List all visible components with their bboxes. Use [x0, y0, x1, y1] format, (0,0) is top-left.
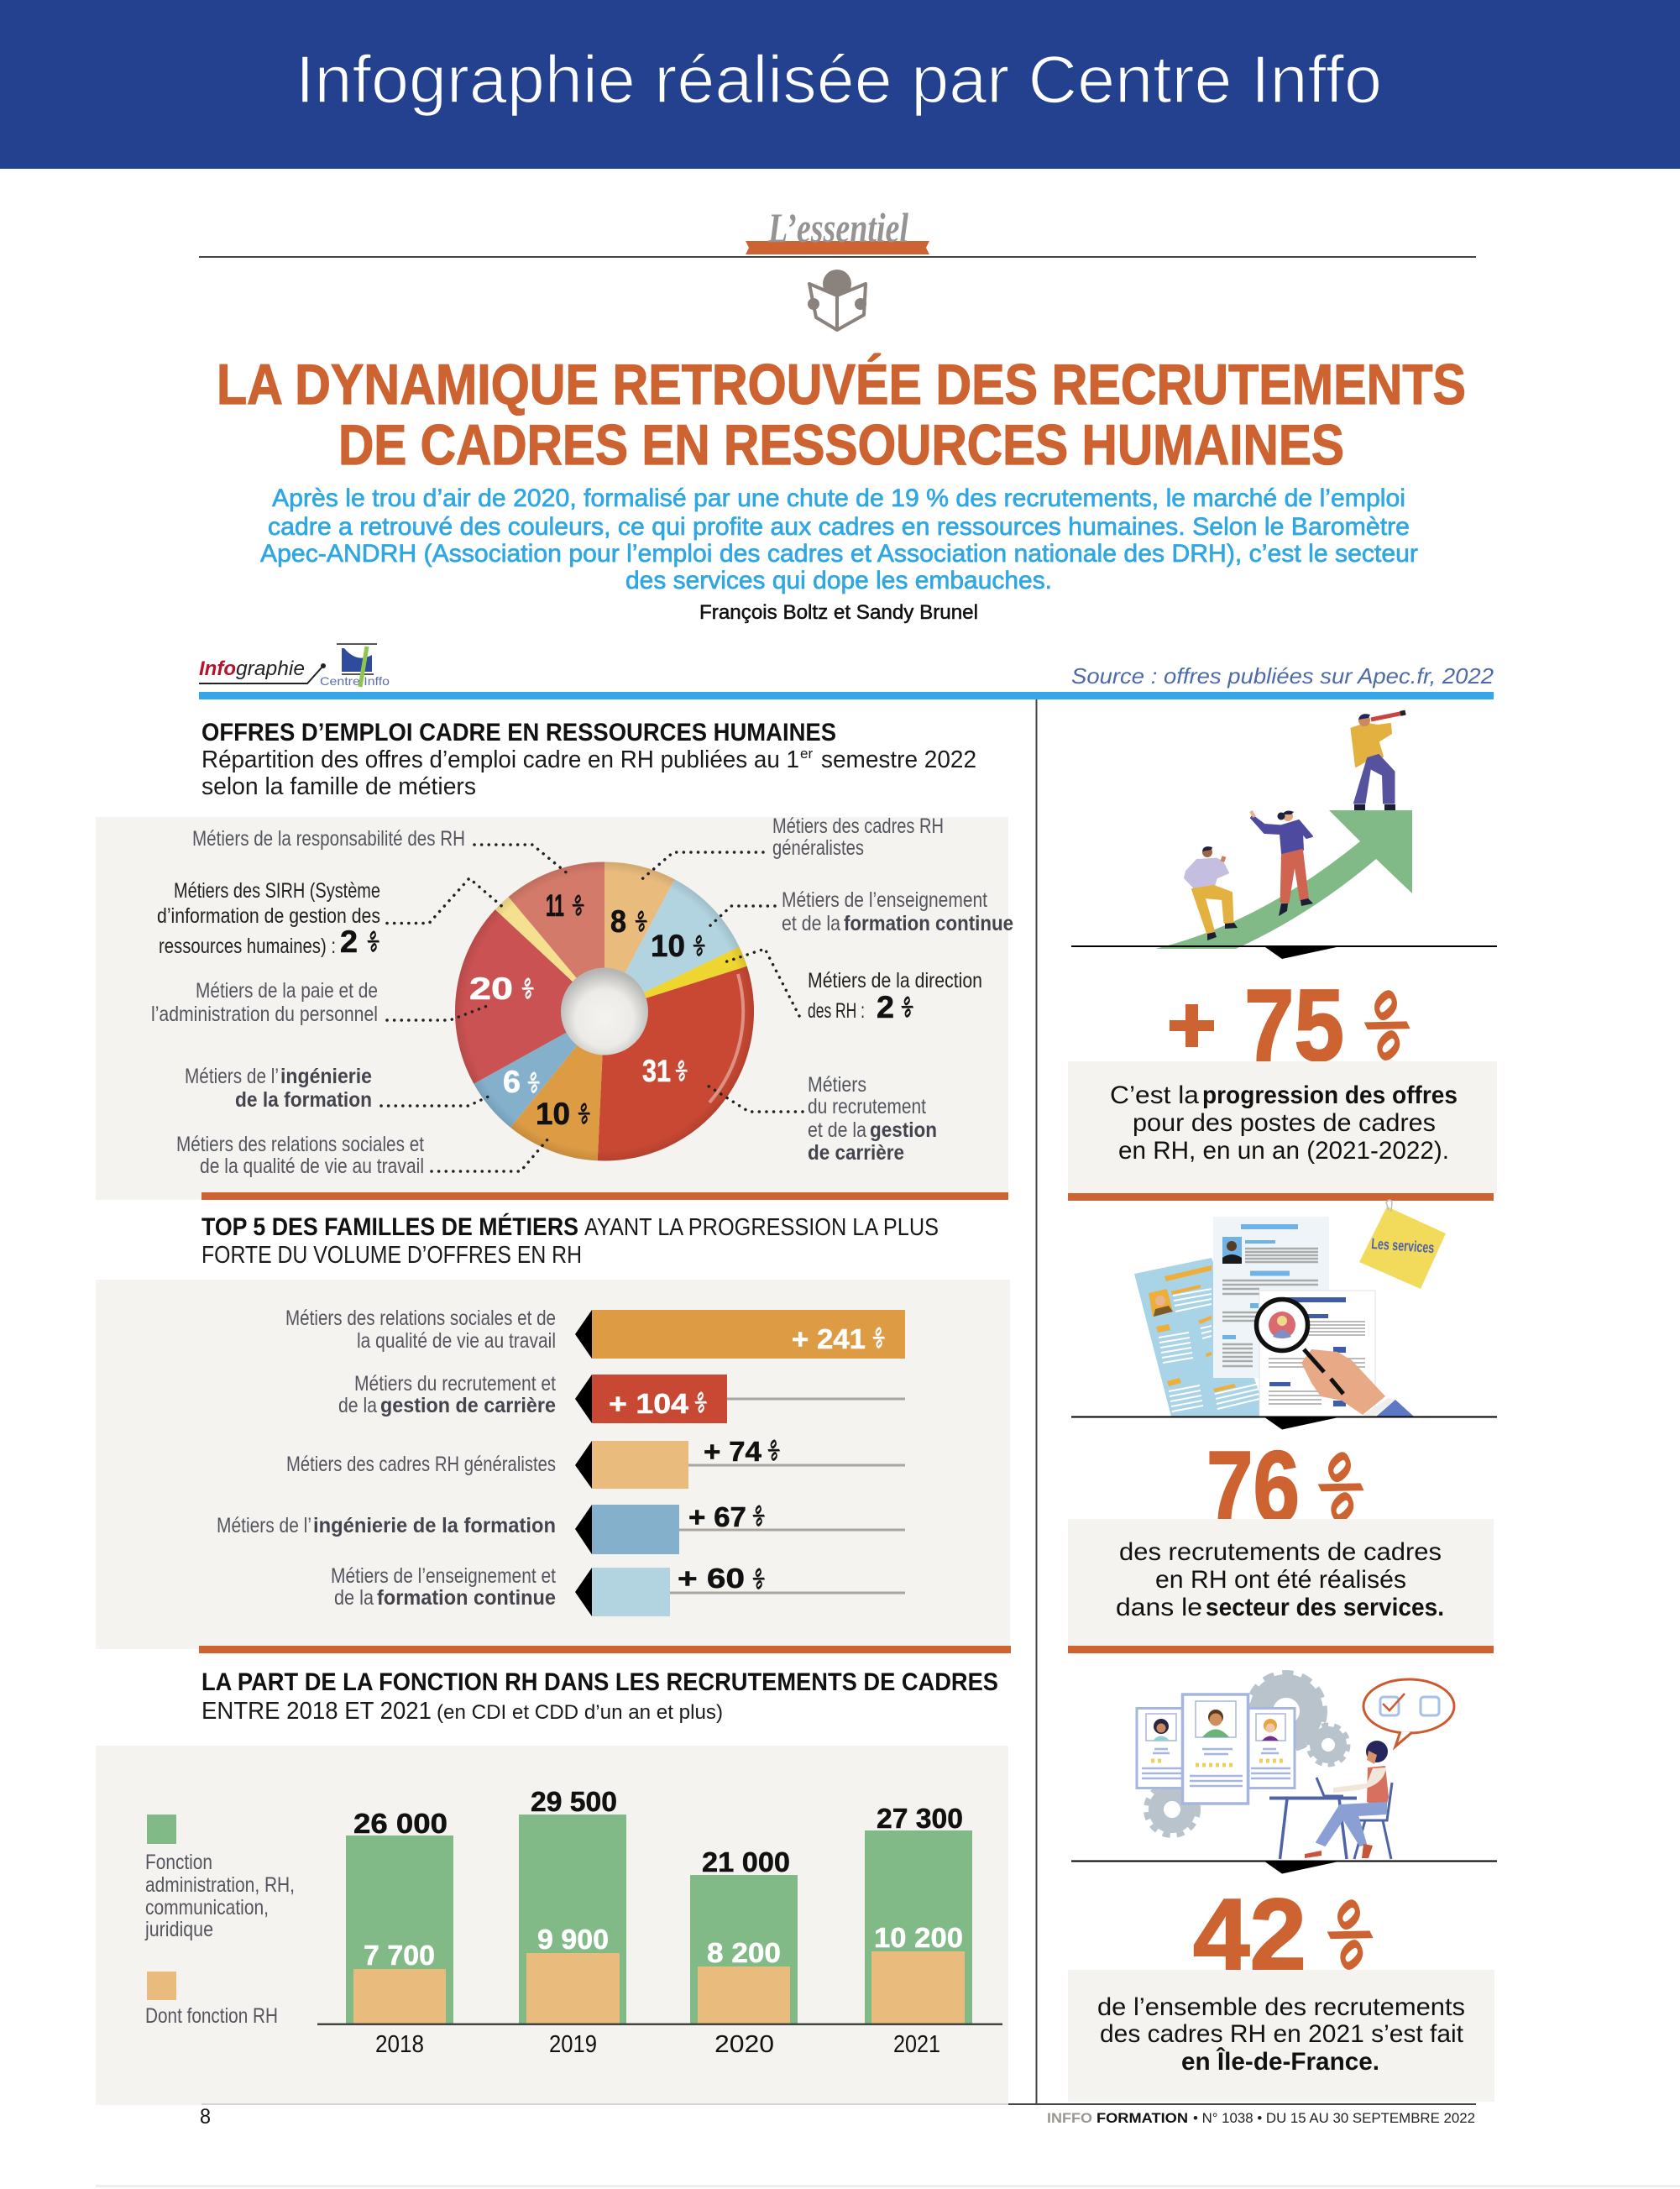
bar: ingénierie: % [749, 1500, 769, 1531]
blue separator [199, 692, 1494, 699]
bar: ingénierie: + 67 [688, 1501, 746, 1532]
stat: 42 %: 42 [1193, 1877, 1306, 1992]
slice labels: 2 [877, 990, 894, 1024]
section heading: top 5 [201, 1212, 939, 1269]
bar: recrutement: de la [338, 1394, 377, 1417]
slice labels: Métiers de la direction [808, 969, 982, 992]
panel: stat text 1: en RH, en un an (2021-2022). [1118, 1137, 1449, 1165]
bar: enseignement [331, 1563, 905, 1616]
slice values: % [518, 973, 538, 1003]
divider with wedge 3 [1071, 1861, 1497, 1874]
slice values: 11 [546, 888, 564, 923]
slice labels: et de la [782, 912, 840, 935]
stat: 42 %: % [1314, 1886, 1386, 1984]
bar: ingénierie: Métiers de l’ [217, 1514, 311, 1537]
illustration: recruiter at desk with profiles [1137, 1673, 1454, 1859]
section heading: offres d'emploi: Répartition des offres d’emploi cadre en RH publiées au 1 [201, 746, 799, 773]
slice values: % [631, 906, 652, 936]
legend: administration, RH, [145, 1873, 295, 1897]
x axis [317, 2024, 1002, 2025]
section heading: offres d'emploi: selon la famille de métiers [201, 773, 476, 800]
logo: infographie Centre Inffo: Info [199, 657, 236, 680]
slice values [469, 888, 709, 1131]
slice labels: du recrutement [808, 1095, 926, 1118]
logo: infographie Centre Inffo [199, 643, 390, 688]
slice values: 20 [469, 971, 513, 1006]
slice values: % [568, 890, 589, 920]
slice values: % [574, 1098, 594, 1129]
bars 2021: 2021 [893, 2031, 940, 2058]
bars 2018: 2018 [375, 2031, 424, 2058]
footer credit [1037, 2103, 1476, 2126]
slice values: % [689, 930, 709, 961]
panel: stat text 1: C’est la [1110, 1081, 1199, 1109]
slice labels: gestion [870, 1118, 937, 1142]
stat: 76 % [1206, 1430, 1377, 1544]
title [217, 353, 1466, 477]
stat: +75 % [1170, 968, 1423, 1082]
bars 2019 [519, 1786, 626, 2058]
footer credit: FORMATION [1096, 2110, 1188, 2126]
section heading: part de la fonction RH: LA PART DE LA FONCTION RH DANS LES RECRUTEMENTS DE CADRES [201, 1668, 998, 1696]
rubric: l'essentiel: L’essentiel [767, 204, 908, 251]
legend: juridique [144, 1918, 213, 1941]
bar: relations sociales [285, 1307, 905, 1359]
lead paragraph: Après le trou d’air de 2020, formalisé par une chute de 19 % des recrutements, le marché de l’emploi [272, 484, 1405, 512]
bar: recrutement: Métiers du recrutement et [354, 1372, 556, 1396]
panel: stat text 1: pour des postes de cadres [1133, 1109, 1436, 1137]
panel: stacked bar chart [96, 1746, 1008, 2105]
bars 2018: 26 000 [353, 1808, 447, 1839]
lead paragraph: cadre a retrouvé des couleurs, ce qui profite aux cadres en ressources humaines. Selon le Baromètre [268, 513, 1410, 541]
bars 2018: 7 700 [364, 1940, 435, 1971]
footer credit: INFFO [1047, 2110, 1092, 2126]
slice labels: de carrière [808, 1141, 904, 1165]
slice labels: généralistes [772, 836, 864, 860]
bar: ingénierie: ingénierie de la formation [313, 1514, 556, 1537]
source note: Source : offres publiées sur Apec.fr, 2022 [1071, 663, 1494, 689]
stat: 42 % [1193, 1877, 1386, 1992]
bar: cadres généralistes: % [764, 1435, 784, 1465]
panel: stat text 2: des recrutements de cadres [1119, 1538, 1442, 1566]
bars 2021 [865, 1803, 972, 2058]
title: DE CADRES EN RESSOURCES HUMAINES [338, 413, 1344, 477]
bar: cadres généralistes: Métiers des cadres RH généralistes [286, 1453, 556, 1476]
title: LA DYNAMIQUE RETROUVÉE DES RECRUTEMENTS [217, 353, 1466, 416]
bars 2020: 21 000 [702, 1846, 790, 1877]
slice labels: Métiers de l’enseignement [782, 888, 987, 912]
stat: 76 %: % [1305, 1438, 1377, 1537]
bars 2020 [690, 1846, 798, 2058]
slice labels: Métiers de l’ [185, 1065, 279, 1088]
bar: cadres généralistes: + 74 [704, 1436, 762, 1467]
slice values: % [672, 1055, 692, 1086]
bar: enseignement: de la [334, 1586, 374, 1610]
page number: 8 [200, 2105, 211, 2129]
slice labels: ingénierie [280, 1065, 372, 1088]
header banner [0, 0, 1680, 169]
bars 2019: 9 900 [537, 1924, 609, 1955]
illustration: CV under magnifying glass [1134, 1200, 1446, 1417]
slice labels: de la formation [235, 1088, 372, 1112]
bars 2021: 10 200 [874, 1922, 963, 1953]
lead paragraph [260, 484, 1418, 594]
lead paragraph: Apec-ANDRH (Association pour l’emploi des cadres et Association nationale des DRH), c’est le secteur [260, 540, 1418, 568]
bar: enseignement: Métiers de l’enseignement et [331, 1564, 556, 1588]
slice labels: % [364, 926, 384, 956]
bars 2020: 8 200 [707, 1937, 781, 1968]
bar: recrutement: gestion de carrière [380, 1394, 556, 1417]
divider with wedge 2 [1071, 1416, 1497, 1429]
slice labels: % [898, 992, 918, 1022]
slice labels: ressources humaines) : [159, 935, 336, 958]
stat: +75 %: % [1351, 977, 1423, 1075]
bar: recrutement [338, 1372, 905, 1423]
bar: relations sociales: % [869, 1322, 889, 1353]
slice values: 31 [642, 1054, 671, 1088]
panel: stat text 3 [1068, 1970, 1494, 2102]
section heading: offres d'emploi: OFFRES D’EMPLOI CADRE EN RESSOURCES HUMAINES [201, 719, 836, 746]
slice labels [151, 814, 1013, 1178]
logo: infographie Centre Inffo: Centre Inffo [320, 674, 390, 688]
panel: stat text 3: des cadres RH en 2021 s’est fait [1100, 2020, 1464, 2048]
section heading: part de la fonction RH [201, 1668, 998, 1725]
slice labels: Métiers [808, 1073, 866, 1097]
slice labels: Métiers de la responsabilité des RH [192, 827, 465, 851]
bars 2021: 27 300 [877, 1803, 963, 1834]
panel: stat text 2: dans le [1116, 1594, 1202, 1621]
panel: stat text 1 [1068, 1061, 1497, 1201]
slice labels: d’information de gestion des [157, 904, 380, 928]
panel: stat text 1: progression des offres [1202, 1081, 1458, 1109]
lead paragraph: des services qui dope les embauches. [625, 567, 1052, 594]
panel: top 5 bar chart [96, 1280, 1011, 1653]
bar: recrutement: % [691, 1387, 711, 1417]
panel: stat text 2: en RH ont été réalisés [1155, 1566, 1406, 1594]
slice labels: formation continue [844, 912, 1013, 935]
bar: enseignement: formation continue [377, 1586, 556, 1610]
slice values: 8 [610, 904, 626, 939]
legend: Fonction [145, 1851, 212, 1874]
section heading: offres d'emploi: er [800, 746, 813, 762]
stat: 76 %: 76 [1206, 1430, 1300, 1544]
panel: stat text 3: en Île-de-France. [1181, 2047, 1379, 2076]
panel: stat text 3: de l’ensemble des recrutements [1097, 1993, 1465, 2021]
section heading: part de la fonction RH: (en CDI et CDD d’un an et plus) [437, 1701, 723, 1724]
slice labels: Métiers des relations sociales et [176, 1133, 424, 1156]
logo: infographie Centre Inffo: graphie [236, 657, 305, 680]
footer credit: • N° 1038 • DU 15 AU 30 SEPTEMBRE 2022 [1193, 2110, 1475, 2126]
leader lines [381, 845, 803, 1171]
bar: relations sociales: + 241 [792, 1323, 866, 1354]
slice labels: l’administration du personnel [151, 1003, 378, 1026]
panel: donut chart [96, 814, 1013, 1200]
slice values: 10 [536, 1097, 570, 1131]
bar: relations sociales: la qualité de vie au travail [357, 1329, 556, 1353]
slice values: 6 [503, 1065, 521, 1099]
illustration: people climbing growth arrow [1155, 713, 1412, 949]
slice labels: de la qualité de vie au travail [200, 1155, 424, 1178]
byline: François Boltz et Sandy Brunel [699, 601, 978, 624]
divider with wedge 1 [1071, 945, 1497, 959]
bar: enseignement: % [749, 1563, 769, 1594]
slice labels: et de la [808, 1118, 866, 1142]
slice labels: des RH : [808, 999, 865, 1023]
slice labels: Métiers de la paie et de [196, 979, 378, 1003]
bars 2019: 29 500 [531, 1786, 617, 1817]
donut chart [455, 861, 754, 1160]
section heading: part de la fonction RH: ENTRE 2018 ET 2021 [201, 1698, 432, 1725]
legend: Dont fonction RH [145, 2004, 278, 2028]
header banner: Infographie réalisée par Centre Inffo [296, 42, 1382, 117]
icon: reader with open book [808, 270, 866, 330]
panel: stat text 2: secteur des services. [1206, 1594, 1444, 1621]
slice values: 10 [651, 929, 685, 963]
stat: +75 %: 75 [1244, 968, 1344, 1082]
illustration: CV under magnifying glass: Les services [1371, 1235, 1435, 1256]
panel: stat text 2 [1068, 1519, 1494, 1653]
section heading: top 5: FORTE DU VOLUME D’OFFRES EN RH [201, 1242, 582, 1269]
slice labels: Métiers des cadres RH [772, 814, 944, 838]
section heading: top 5: TOP 5 DES FAMILLES DE MÉTIERS [201, 1212, 578, 1241]
slice labels: 2 [340, 924, 358, 959]
section heading: top 5: AYANT LA PROGRESSION LA PLUS [584, 1214, 939, 1241]
legend [144, 1815, 295, 2028]
bar: cadres généralistes [286, 1435, 905, 1489]
legend: communication, [145, 1896, 269, 1919]
slice values: % [524, 1067, 544, 1097]
bars 2019: 2019 [549, 2031, 597, 2058]
bar: relations sociales: Métiers des relations sociales et de [285, 1307, 556, 1330]
rubric: l'essentiel [199, 204, 1476, 258]
bar: ingénierie [217, 1500, 905, 1554]
column divider [1008, 699, 1036, 2104]
section heading: offres d'emploi [201, 719, 976, 800]
bar: recrutement: + 104 [609, 1388, 689, 1419]
bars 2020: 2020 [714, 2031, 774, 2058]
slice labels: Métiers des SIRH (Système [174, 879, 380, 903]
section heading: offres d'emploi: semestre 2022 [821, 746, 976, 773]
bar: enseignement: + 60 [678, 1563, 745, 1594]
bars 2018 [346, 1808, 453, 2058]
